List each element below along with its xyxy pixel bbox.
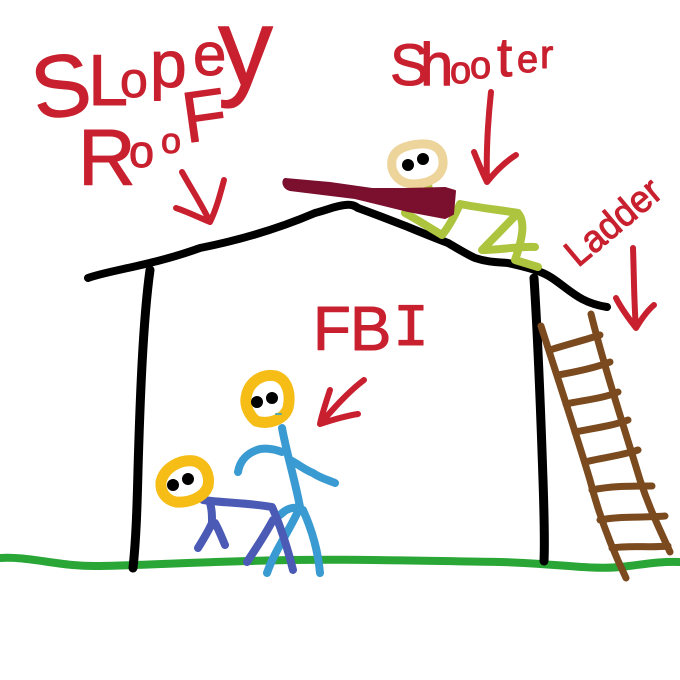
shooter bbox=[283, 144, 538, 267]
ground bbox=[0, 558, 680, 568]
FBI agent standing bbox=[238, 375, 335, 573]
arrow: to roof bbox=[176, 172, 224, 222]
label: Slopey: S bbox=[25, 33, 97, 139]
label: Shooter: o bbox=[470, 45, 491, 87]
shooter eyes bbox=[402, 153, 429, 171]
label: Shooter: S bbox=[390, 33, 429, 98]
rifle bbox=[283, 179, 455, 218]
label: Shooter: o bbox=[450, 50, 471, 92]
label: FBI: B bbox=[350, 295, 391, 364]
crawling head bbox=[161, 461, 208, 502]
label: Shooter: r bbox=[540, 33, 553, 77]
crawling body bbox=[198, 500, 293, 570]
label: Slopey: o bbox=[120, 52, 148, 108]
label: Slopey: e bbox=[193, 21, 226, 88]
shooter head bbox=[392, 144, 443, 184]
label: Shooter: h bbox=[420, 31, 453, 98]
agent eyes bbox=[251, 392, 278, 408]
label: Shooter: t bbox=[497, 26, 512, 88]
arrow: to shooter bbox=[474, 92, 516, 182]
FBI agent on all fours bbox=[161, 461, 293, 570]
label: Slopey: L bbox=[88, 41, 128, 121]
label: Ladder: Ladder bbox=[557, 170, 671, 275]
house walls bbox=[133, 270, 544, 568]
label: Shooter: e bbox=[517, 39, 538, 81]
shooter body bbox=[405, 183, 538, 267]
label: FBI: I bbox=[393, 296, 429, 364]
label: FBI: F bbox=[313, 295, 351, 364]
arrow: to ladder bbox=[616, 248, 654, 328]
agent head bbox=[246, 375, 289, 422]
crawling eyes bbox=[167, 473, 194, 491]
arrow: to agents bbox=[320, 380, 364, 424]
agent body bbox=[238, 428, 335, 573]
label: Roof: R bbox=[78, 113, 136, 202]
label: Slopey: p bbox=[150, 27, 187, 101]
ladder bbox=[541, 314, 670, 578]
label: Roof: o bbox=[129, 126, 154, 177]
label: Roof: o bbox=[161, 120, 181, 161]
sloped roof bbox=[88, 205, 607, 307]
label: Roof: F bbox=[177, 74, 232, 159]
